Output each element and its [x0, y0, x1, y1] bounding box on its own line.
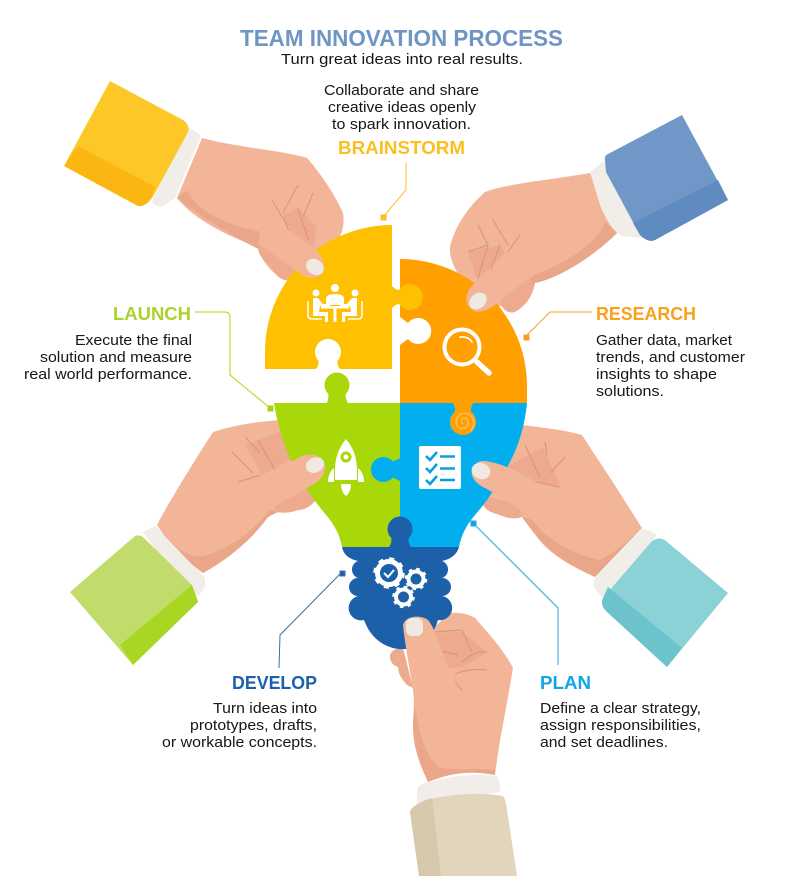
text block: launch: [24, 304, 192, 383]
text block: research: trends, and customer: [596, 350, 745, 366]
text block: research: [596, 304, 745, 400]
text block: research: insights to shape: [596, 367, 717, 383]
text block: develop: [162, 673, 317, 751]
puzzle bulb: [265, 225, 527, 649]
text block: develop: or workable concepts.: [162, 735, 317, 751]
piece: dark blue develop: [342, 517, 459, 649]
subtitle: Turn great ideas into real results.: [281, 52, 523, 68]
thumb: top left: [258, 220, 327, 279]
text block: plan: Define a clear strategy,: [540, 701, 701, 717]
thumb: middle left: [240, 454, 327, 510]
text block: brainstorm: Collaborate and share: [324, 83, 479, 99]
connector: develop: [279, 571, 345, 668]
text block: launch: Execute the final: [75, 333, 192, 349]
text block: launch: real world performance.: [24, 367, 192, 383]
text block: plan: and set deadlines.: [540, 735, 668, 751]
hand: top right, blue sleeve (back of hand): [450, 115, 728, 313]
connector: plan: [471, 521, 558, 665]
piece: green launch: [274, 373, 400, 547]
text block: research: Gather data, market: [596, 333, 732, 349]
hand: top left, yellow sleeve (back of hand): [64, 81, 344, 282]
icon: gears: [375, 559, 426, 607]
text block: brainstorm: BRAINSTORM: [338, 138, 465, 158]
hand: bottom, beige sleeve (back of hand): [390, 613, 517, 876]
connector: research: [524, 312, 592, 340]
icon: magnifier: [444, 330, 489, 373]
text block: launch: solution and measure: [40, 350, 192, 366]
title: TEAM INNOVATION PROCESS: [240, 25, 563, 51]
text block: launch: LAUNCH: [113, 304, 191, 324]
text block: plan: [540, 673, 701, 751]
text block: plan: PLAN: [540, 673, 591, 693]
thumb: middle right: [469, 460, 540, 515]
connector: brainstorm: [381, 163, 406, 220]
thumb: bottom: [403, 617, 462, 720]
text block: plan: assign responsibilities,: [540, 718, 701, 734]
piece: yellow brainstorm: [265, 225, 423, 369]
piece: orange research: [400, 259, 527, 435]
hand: middle right, teal sleeve (back of hand): [472, 425, 728, 667]
icon: rocket: [328, 439, 364, 496]
thumb: top right: [466, 255, 535, 313]
text block: develop: prototypes, drafts,: [190, 718, 317, 734]
text block: brainstorm: [324, 83, 479, 158]
piece: blue plan: [371, 403, 527, 547]
text block: develop: DEVELOP: [232, 673, 317, 693]
icon: meeting: [308, 284, 362, 322]
connector: launch: [195, 312, 273, 411]
hand: middle left, green sleeve (back of hand): [70, 420, 325, 665]
text block: develop: Turn ideas into: [213, 701, 317, 717]
swirl on orange tab: [456, 413, 474, 431]
text block: brainstorm: to spark innovation.: [332, 117, 471, 133]
icon: checklist: [419, 446, 461, 489]
text block: brainstorm: creative ideas openly: [328, 100, 477, 116]
text block: research: RESEARCH: [596, 304, 696, 324]
text block: research: solutions.: [596, 384, 664, 400]
